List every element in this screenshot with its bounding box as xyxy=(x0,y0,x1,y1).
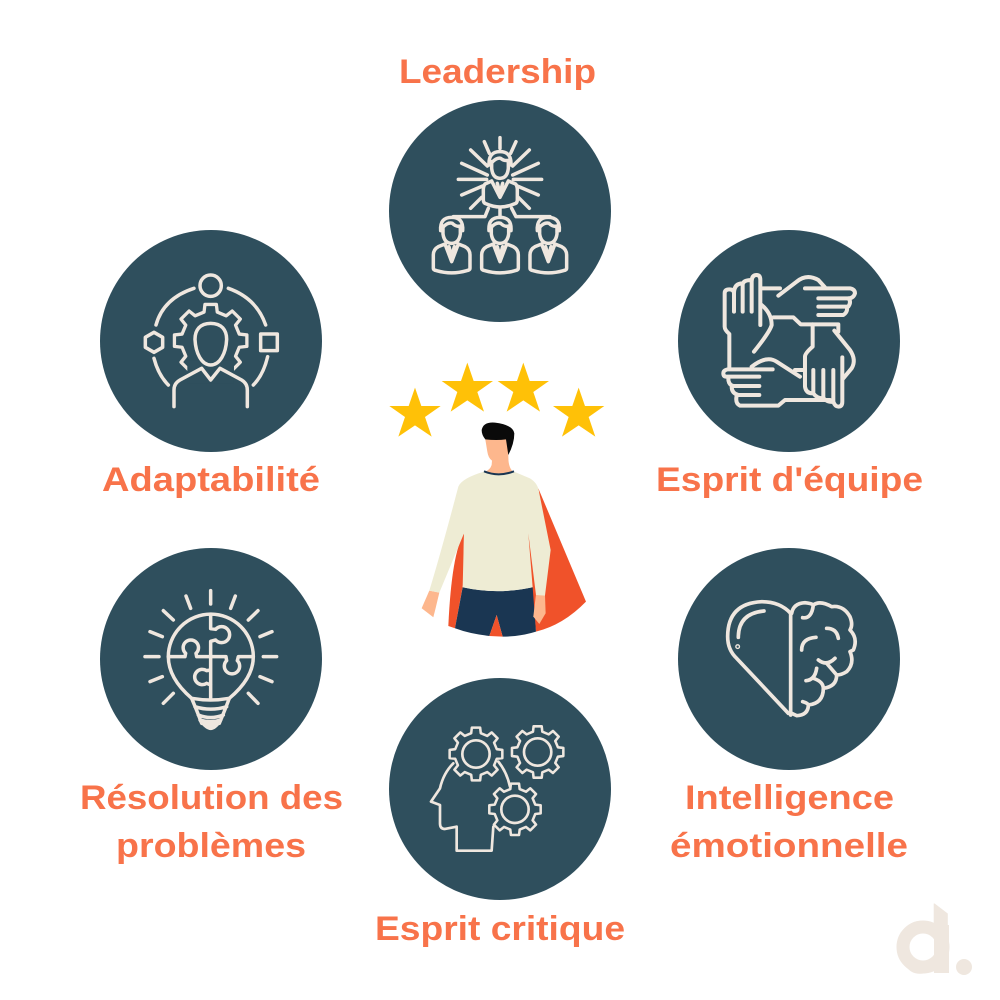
logo mark: d xyxy=(899,888,953,992)
heading: Intelligence émotionnelle xyxy=(670,779,908,865)
panel: Esprit critique circle xyxy=(389,678,611,900)
icon: person with gear xyxy=(145,275,277,407)
panel: Esprit d'équipe circle xyxy=(678,230,900,452)
rating stars xyxy=(389,363,604,437)
icon: four linked hands xyxy=(723,275,855,407)
heading: Adaptabilité: Adaptabilité xyxy=(102,461,320,499)
central figure: man with cape xyxy=(422,423,586,637)
heading: Leadership: Leadership xyxy=(399,53,596,91)
panel: Leadership circle xyxy=(389,100,611,322)
icon: puzzle light bulb xyxy=(145,591,277,728)
panel: Résolution des problèmes circle xyxy=(100,548,322,770)
heading: Esprit critique: Esprit critique xyxy=(375,910,625,948)
heading: Résolution des problèmes: problèmes xyxy=(116,827,306,865)
panel: Adaptabilité circle xyxy=(100,230,322,452)
heading: Esprit d'équipe: Esprit d'équipe xyxy=(656,461,923,499)
icon: heart and brain xyxy=(728,602,855,716)
panel: Intelligence émotionnelle circle xyxy=(678,548,900,770)
heading: Résolution des problèmes xyxy=(80,779,343,865)
icon: head with gears xyxy=(431,726,563,851)
heading: Résolution des problèmes: Résolution des xyxy=(80,779,343,817)
heading: Intelligence émotionnelle: Intelligence xyxy=(685,779,894,817)
heading: Intelligence émotionnelle: émotionnelle xyxy=(670,827,908,865)
icon: leader and team xyxy=(433,138,567,273)
